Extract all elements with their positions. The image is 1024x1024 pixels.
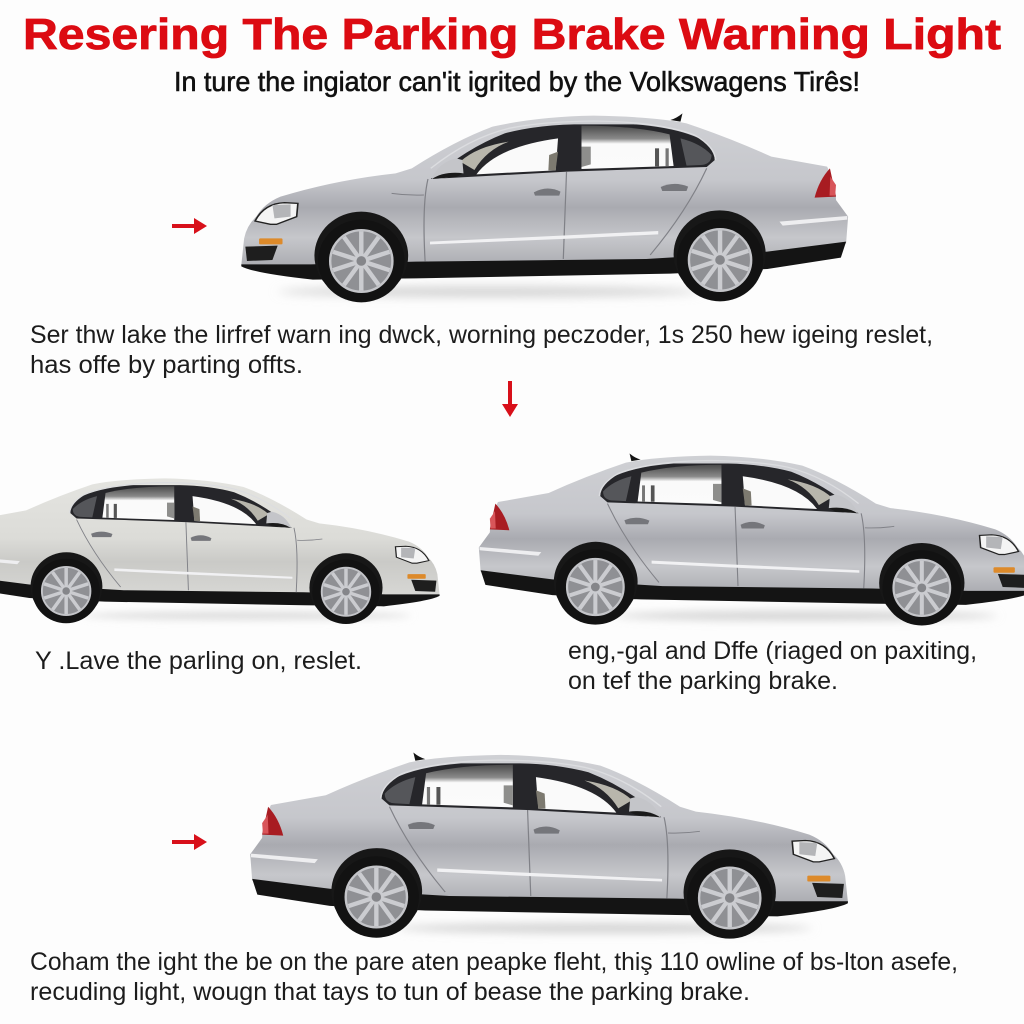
- text block: step 4: [30, 948, 958, 1006]
- arrow: step 4 right: [172, 834, 207, 850]
- car: step 3 silver sedan facing right: [479, 454, 1024, 626]
- arrow: down: [502, 381, 518, 417]
- car: step 1 silver sedan facing left: [241, 113, 848, 302]
- text block: step 3: on tef the parking brake.: [568, 667, 838, 695]
- text block: step 1: [30, 321, 933, 379]
- text block: step 4: Coham the ight the be on the pare aten peapke fleht, thiş 110 owline of bs-lton asefe,: [30, 948, 958, 976]
- arrow: step 1 right: [172, 218, 207, 234]
- subtitle: In ture the ingiator can'it igrited by the Volkswagens Tirês!: [174, 66, 860, 97]
- text block: step 4: recuding light, wougn that tays to tun of bease the parking brake.: [30, 978, 750, 1006]
- title: Resering The Parking Brake Warning Light: [23, 10, 1001, 59]
- car: step 2 white sedan facing right: [0, 478, 440, 624]
- text block: step 3: [568, 637, 977, 695]
- car: step 4 silver sedan facing right: [250, 753, 848, 939]
- text block: step 3: eng,-gal and Dffe (riaged on paxiting,: [568, 637, 977, 665]
- text block: step 1: has offe by parting offts.: [30, 351, 303, 379]
- text block: step 2: Y .Lave the parling on, reslet.: [35, 647, 362, 675]
- text block: step 1: Ser thw lake the lirfref warn ing dwck, worning peczoder, 1s 250 hew igeing reslet,: [30, 321, 933, 349]
